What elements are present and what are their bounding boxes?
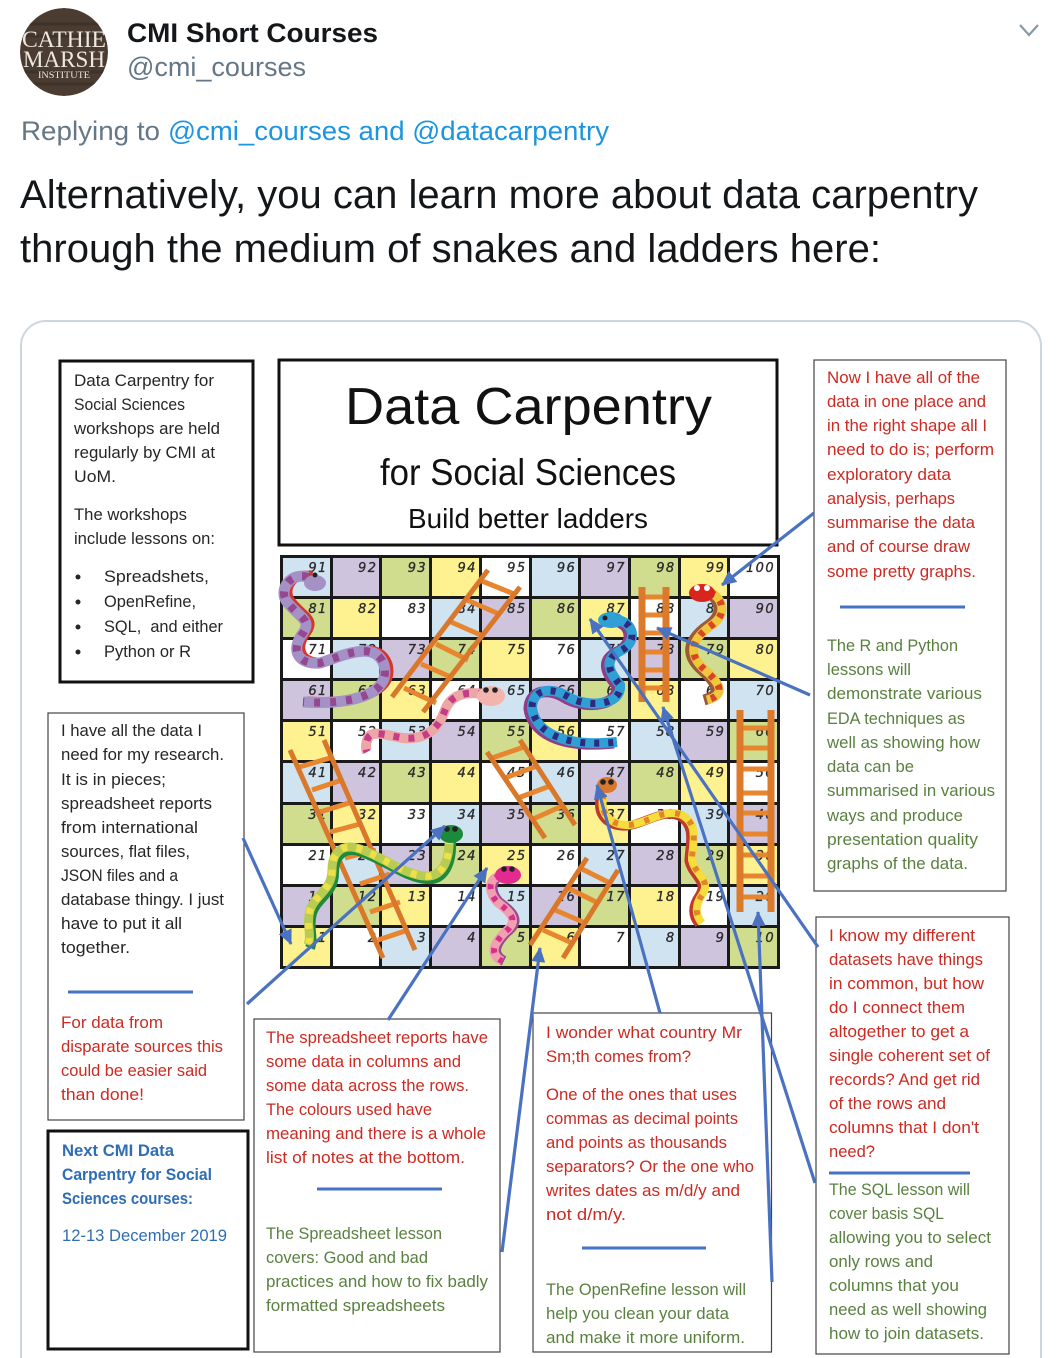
panel: collecting data	[48, 713, 244, 1120]
arrow: to snake head 87	[590, 619, 818, 947]
panel: analysis notes: analysis, perhaps	[827, 489, 955, 508]
board: snakes and ladders grid: 66	[557, 684, 576, 699]
board: snakes and ladders grid: 2	[368, 931, 377, 946]
panel: analysis notes: some pretty graphs.	[827, 562, 976, 581]
icon: avatar logo: MARSH	[23, 47, 105, 72]
panel: openrefine	[533, 1013, 772, 1352]
panel: spreadsheets: The Spreadsheet lesson	[266, 1224, 442, 1243]
board: snakes and ladders grid: 97	[607, 561, 626, 576]
board: snakes and ladders grid: 41	[308, 766, 328, 781]
panel: analysis notes: presentation quality	[827, 830, 979, 849]
panel: openrefine: writes dates as m/d/y and	[545, 1181, 740, 1200]
panel: analysis notes: data in one place and	[827, 392, 986, 411]
panel: title: Data Carpentry	[345, 378, 712, 436]
board: snakes and ladders grid: 10	[756, 931, 775, 946]
arrow: to square 1	[243, 838, 291, 944]
board: snakes and ladders grid: 62	[358, 684, 377, 699]
panel: sql: do I connect them	[829, 998, 965, 1017]
panel: next courses: Sciences courses:	[62, 1189, 193, 1208]
arrow: to ladder 68	[663, 707, 815, 1183]
panel: collecting data: I have all the data I	[61, 721, 202, 740]
board: snakes and ladders grid: 7	[616, 931, 626, 946]
panel: openrefine: commas as decimal points	[546, 1109, 738, 1128]
snake: pink	[366, 686, 505, 752]
panel: workshop intro: regularly by CMI at	[74, 443, 215, 462]
reply line: Replying to	[21, 116, 160, 146]
board: snakes and ladders grid: 39	[706, 808, 725, 823]
board: snakes and ladders grid: 22	[358, 849, 377, 864]
panel: openrefine: One of the ones that uses	[546, 1085, 737, 1104]
arrow: to snake head 47	[597, 785, 660, 1013]
board: snakes and ladders grid: 63	[408, 684, 427, 699]
board: snakes and ladders grid: 52	[358, 725, 377, 740]
board: snakes and ladders grid: 78	[656, 643, 676, 658]
panel: sql: how to join datasets.	[829, 1324, 984, 1343]
panel: openrefine: and points as thousands	[546, 1133, 727, 1152]
panel: spreadsheets: some data across the rows.	[266, 1076, 469, 1095]
board: snakes and ladders grid: 59	[706, 725, 725, 740]
icon: avatar logo: CATHIE	[22, 27, 106, 52]
board: snakes and ladders grid: 92	[358, 561, 377, 576]
panel: sql: records? And get rid	[829, 1070, 980, 1089]
icon: chevron menu	[1020, 25, 1038, 35]
snake: orange	[597, 777, 705, 924]
panel: collecting data: spreadsheet reports	[61, 794, 212, 813]
board: snakes and ladders grid: 73	[408, 643, 427, 658]
arrow: to snake head 99	[722, 513, 814, 585]
board: snakes and ladders grid: 87	[607, 602, 626, 617]
board: snakes and ladders grid: 21	[308, 849, 328, 864]
board: snakes and ladders grid: 16	[557, 890, 576, 905]
board: snakes and ladders grid: 83	[408, 602, 427, 617]
ladder: 55 to 36	[487, 740, 575, 838]
board: snakes and ladders grid	[280, 555, 780, 969]
board: snakes and ladders grid: 86	[557, 602, 576, 617]
panel: collecting data: together.	[61, 938, 130, 957]
panel: workshop intro: SQL, and either	[104, 617, 223, 636]
panel: analysis notes: graphs of the data.	[827, 854, 968, 873]
panel: analysis notes: in the right shape all I	[827, 416, 987, 435]
board: snakes and ladders grid: 46	[557, 766, 576, 781]
snake: magenta	[491, 866, 521, 961]
panel: sql: need as well showing	[829, 1300, 987, 1319]
panel: openrefine: and make it more uniform.	[546, 1328, 745, 1347]
panel: analysis notes: summarise the data	[827, 513, 976, 532]
panel: sql: single coherent set of	[829, 1046, 990, 1065]
panel: sql: of the rows and	[829, 1094, 946, 1113]
arrow: to snake head 25	[388, 868, 487, 1020]
ladder: 20 to 60	[740, 710, 771, 912]
board: snakes and ladders grid: 31	[308, 808, 328, 823]
board: snakes and ladders grid: 11	[308, 890, 328, 905]
board: snakes and ladders grid: 72	[358, 643, 377, 658]
icon: avatar logo	[20, 8, 108, 96]
panel: analysis notes: demonstrate various	[827, 684, 982, 703]
panel: collecting data: database thingy. I just	[61, 890, 224, 909]
board: snakes and ladders grid: 13	[408, 890, 427, 905]
panel: workshop intro: The workshops	[74, 505, 187, 524]
panel: sql: only rows and	[829, 1252, 933, 1271]
board: snakes and ladders grid: 8	[666, 931, 676, 946]
board: snakes and ladders grid: 91	[308, 561, 328, 576]
panel: openrefine: help you clean your data	[546, 1304, 730, 1323]
board: snakes and ladders grid: 20	[756, 890, 775, 905]
panel: sql: datasets have things	[829, 950, 983, 969]
panel: collecting data: disparate sources this	[61, 1037, 223, 1056]
panel: sql: columns that I don't	[829, 1118, 979, 1137]
board: snakes and ladders grid: 17	[607, 890, 626, 905]
board: snakes and ladders grid: 24	[457, 849, 477, 864]
ladder: 68 to 88	[642, 587, 666, 702]
board: snakes and ladders grid: 61	[308, 684, 328, 699]
board: snakes and ladders grid: 93	[408, 561, 427, 576]
board: snakes and ladders grid: 100	[746, 561, 775, 576]
panel: title	[279, 360, 777, 545]
board: snakes and ladders grid: 81	[308, 602, 328, 617]
snake: blue	[529, 612, 632, 744]
board: snakes and ladders grid: 36	[557, 808, 576, 823]
board: snakes and ladders grid: 51	[308, 725, 328, 740]
panel: sql: cover basis SQL	[829, 1204, 944, 1223]
panel: spreadsheets	[254, 1019, 500, 1352]
panel: collecting data: It is in pieces;	[61, 770, 166, 789]
panel: analysis notes: Now I have all of the	[827, 368, 980, 387]
tweet text	[20, 173, 978, 271]
panel: sql: need?	[829, 1142, 875, 1161]
panel: workshop intro: workshops are held	[73, 419, 220, 438]
board: snakes and ladders grid: 65	[507, 684, 526, 699]
panel: openrefine: separators? Or the one who	[546, 1157, 754, 1176]
board: snakes and ladders grid: 27	[607, 849, 626, 864]
arrows	[243, 513, 818, 1282]
board: snakes and ladders grid: 19	[706, 890, 725, 905]
board: snakes and ladders grid: 42	[358, 766, 377, 781]
panel: analysis notes	[814, 360, 1006, 891]
board: snakes and ladders grid: 49	[706, 766, 725, 781]
board: snakes and ladders grid: 77	[607, 643, 626, 658]
board: snakes and ladders grid: 90	[756, 602, 775, 617]
tweet header: account	[20, 8, 1038, 96]
icon: avatar logo: INSTITUTE	[38, 71, 90, 81]
panel: collecting data: sources, flat files,	[61, 842, 190, 861]
panel: collecting data: could be easier said	[61, 1061, 207, 1080]
panel: spreadsheets: The spreadsheet reports have	[266, 1028, 488, 1047]
account handle: @cmi_courses	[127, 52, 306, 82]
board: snakes and ladders grid: 60	[756, 725, 775, 740]
panel: analysis notes: and of course draw	[827, 537, 971, 556]
board: snakes and ladders grid: 1	[318, 931, 328, 946]
panel: infographic card	[20, 320, 1042, 1358]
panel: analysis notes: need to do is; perform	[827, 440, 994, 459]
account name: CMI Short Courses	[127, 18, 378, 48]
board: snakes and ladders grid: 88	[656, 602, 676, 617]
board: snakes and ladders grid: 38	[656, 808, 676, 823]
board: snakes and ladders grid: 48	[656, 766, 676, 781]
panel: collecting data: have to put it all	[61, 914, 182, 933]
ladder: 51 to 12	[290, 740, 415, 958]
board: snakes and ladders grid: 14	[457, 890, 477, 905]
board: snakes and ladders grid: 45	[507, 766, 526, 781]
panel: analysis notes: data can be	[827, 757, 914, 776]
board: snakes and ladders grid: 3	[417, 931, 427, 946]
board: snakes and ladders grid: 55	[507, 725, 526, 740]
panel: analysis notes: well as showing how	[826, 733, 981, 752]
panel: collecting data: need for my research.	[61, 745, 224, 764]
board: snakes and ladders grid: 89	[706, 602, 725, 617]
board: snakes and ladders grid: 28	[656, 849, 676, 864]
board: snakes and ladders grid: 30	[756, 849, 775, 864]
panel: workshop intro: Data Carpentry for	[74, 371, 214, 390]
board: snakes and ladders grid: 6	[567, 931, 576, 946]
arrow: to ladder 20	[758, 912, 772, 1282]
board: snakes and ladders grid: 69	[706, 684, 725, 699]
board: snakes and ladders grid: 57	[607, 725, 626, 740]
board: snakes and ladders grid: 9	[716, 931, 725, 946]
panel: collecting data: than done!	[61, 1085, 144, 1104]
panel: analysis notes: ways and produce	[826, 806, 963, 825]
panel: analysis notes: summarised in various	[827, 781, 995, 800]
panel: openrefine: I wonder what country Mr	[546, 1023, 742, 1042]
ladders	[290, 570, 771, 958]
board: snakes and ladders grid: 50	[756, 766, 775, 781]
panel: spreadsheets: covers: Good and bad	[266, 1248, 428, 1267]
board: snakes and ladders grid: 76	[557, 643, 576, 658]
board: snakes and ladders grid: 12	[358, 890, 377, 905]
board: snakes and ladders grid: 56	[557, 725, 576, 740]
board: snakes and ladders grid: 94	[457, 561, 477, 576]
board: snakes and ladders grid: 85	[507, 602, 526, 617]
board: snakes and ladders grid: 35	[507, 808, 526, 823]
board: snakes and ladders grid: 74	[457, 643, 477, 658]
panel: collecting data: JSON files and a	[61, 866, 178, 885]
panel: spreadsheets: The colours used have	[266, 1100, 432, 1119]
panel: title: Build better ladders	[408, 503, 648, 534]
board: snakes and ladders grid: 25	[507, 849, 526, 864]
board: snakes and ladders grid: 58	[656, 725, 676, 740]
board: snakes and ladders grid: 79	[706, 643, 725, 658]
arrow: to ladder 88	[657, 628, 810, 695]
board: snakes and ladders grid: 44	[457, 766, 477, 781]
board: snakes and ladders grid: 26	[557, 849, 576, 864]
arrow: to snake head 34	[247, 826, 445, 1004]
panel: sql: I know my different	[829, 926, 975, 945]
board: snakes and ladders grid: 15	[507, 890, 526, 905]
board: snakes and ladders grid: 4	[467, 931, 477, 946]
board: snakes and ladders grid: 84	[457, 602, 477, 617]
panel: analysis notes: lessons will	[827, 660, 911, 679]
panel: spreadsheets: list of notes at the bottom.	[266, 1148, 465, 1167]
board: snakes and ladders grid: 82	[358, 602, 377, 617]
panel: sql	[816, 917, 1009, 1354]
snake: red	[689, 584, 722, 700]
board: snakes and ladders grid: 98	[656, 561, 676, 576]
board: snakes and ladders grid: 34	[457, 808, 477, 823]
snakes	[284, 572, 722, 961]
board: snakes and ladders grid: 32	[358, 808, 377, 823]
panel: spreadsheets: some data in columns and	[266, 1052, 461, 1071]
board: snakes and ladders grid: 96	[557, 561, 576, 576]
board: snakes and ladders grid: 5	[517, 931, 526, 946]
board: snakes and ladders grid: 75	[507, 643, 526, 658]
board: snakes and ladders grid: 37	[607, 808, 626, 823]
panel: title: for Social Sciences	[380, 452, 676, 493]
board: snakes and ladders grid: 54	[457, 725, 477, 740]
board: snakes and ladders grid: 29	[706, 849, 725, 864]
panel: next courses: Carpentry for Social	[62, 1165, 212, 1184]
board: snakes and ladders grid: 67	[607, 684, 626, 699]
panel: collecting data: from international	[61, 818, 198, 837]
panel: openrefine: The OpenRefine lesson will	[546, 1280, 746, 1299]
tweet text: through the medium of snakes and ladders here:	[20, 227, 881, 271]
board: snakes and ladders grid: 80	[756, 643, 775, 658]
panel: workshop intro	[60, 361, 253, 682]
panel: analysis notes: EDA techniques as	[827, 709, 965, 728]
board: snakes and ladders grid: 70	[756, 684, 775, 699]
board: snakes and ladders grid: 23	[408, 849, 427, 864]
board: snakes and ladders grid: 68	[656, 684, 676, 699]
snake: purple	[284, 572, 389, 703]
board: snakes and ladders grid: 71	[308, 643, 328, 658]
panel: openrefine: Sm;th comes from?	[546, 1047, 691, 1066]
panel: sql: in common, but how	[829, 974, 985, 993]
board: snakes and ladders grid: 95	[507, 561, 526, 576]
ladder: 63 to 94	[392, 570, 520, 712]
panel: workshop intro: Social Sciences	[74, 395, 185, 414]
board: snakes and ladders grid: 18	[656, 890, 676, 905]
panel: spreadsheets: meaning and there is a whole	[266, 1124, 486, 1143]
panel: sql: allowing you to select	[829, 1228, 991, 1247]
board: snakes and ladders grid: 47	[607, 766, 626, 781]
snake: green	[308, 825, 463, 948]
panel: next courses: 12-13 December 2019	[62, 1226, 227, 1245]
panel: sql: altogether to get a	[829, 1022, 970, 1041]
board: snakes and ladders grid: 43	[408, 766, 427, 781]
panel: spreadsheets: formatted spreadsheets	[266, 1296, 445, 1315]
panel: sql: columns that you	[829, 1276, 959, 1295]
panel: sql: The SQL lesson will	[829, 1180, 970, 1199]
arrow: to ladder 6	[502, 948, 540, 1252]
ladder: 6 to 27	[530, 858, 618, 958]
board: snakes and ladders grid: 64	[457, 684, 477, 699]
reply line: @cmi_courses and @datacarpentry	[168, 116, 610, 146]
panel: workshop intro: UoM.	[74, 467, 116, 486]
panel: workshop intro: Python or R	[104, 642, 191, 661]
panel: next courses: Next CMI Data	[62, 1141, 175, 1160]
board: snakes and ladders grid: 40	[756, 808, 775, 823]
panel: analysis notes: The R and Python	[827, 636, 958, 655]
panel: workshop intro: OpenRefine,	[104, 592, 196, 611]
panel: analysis notes: exploratory data	[827, 465, 952, 484]
panel: next courses	[48, 1131, 248, 1349]
panel: workshop intro: Spreadshets,	[104, 567, 209, 586]
panel: collecting data: For data from	[61, 1013, 163, 1032]
panel: openrefine: not d/m/y.	[546, 1205, 626, 1224]
board: snakes and ladders grid: 33	[408, 808, 427, 823]
board: snakes and ladders grid: 99	[706, 561, 725, 576]
tweet text: Alternatively, you can learn more about data carpentry	[20, 173, 978, 217]
panel: workshop intro: include lessons on:	[74, 529, 215, 548]
panel: spreadsheets: practices and how to fix badly	[266, 1272, 488, 1291]
board: snakes and ladders grid: 53	[408, 725, 427, 740]
